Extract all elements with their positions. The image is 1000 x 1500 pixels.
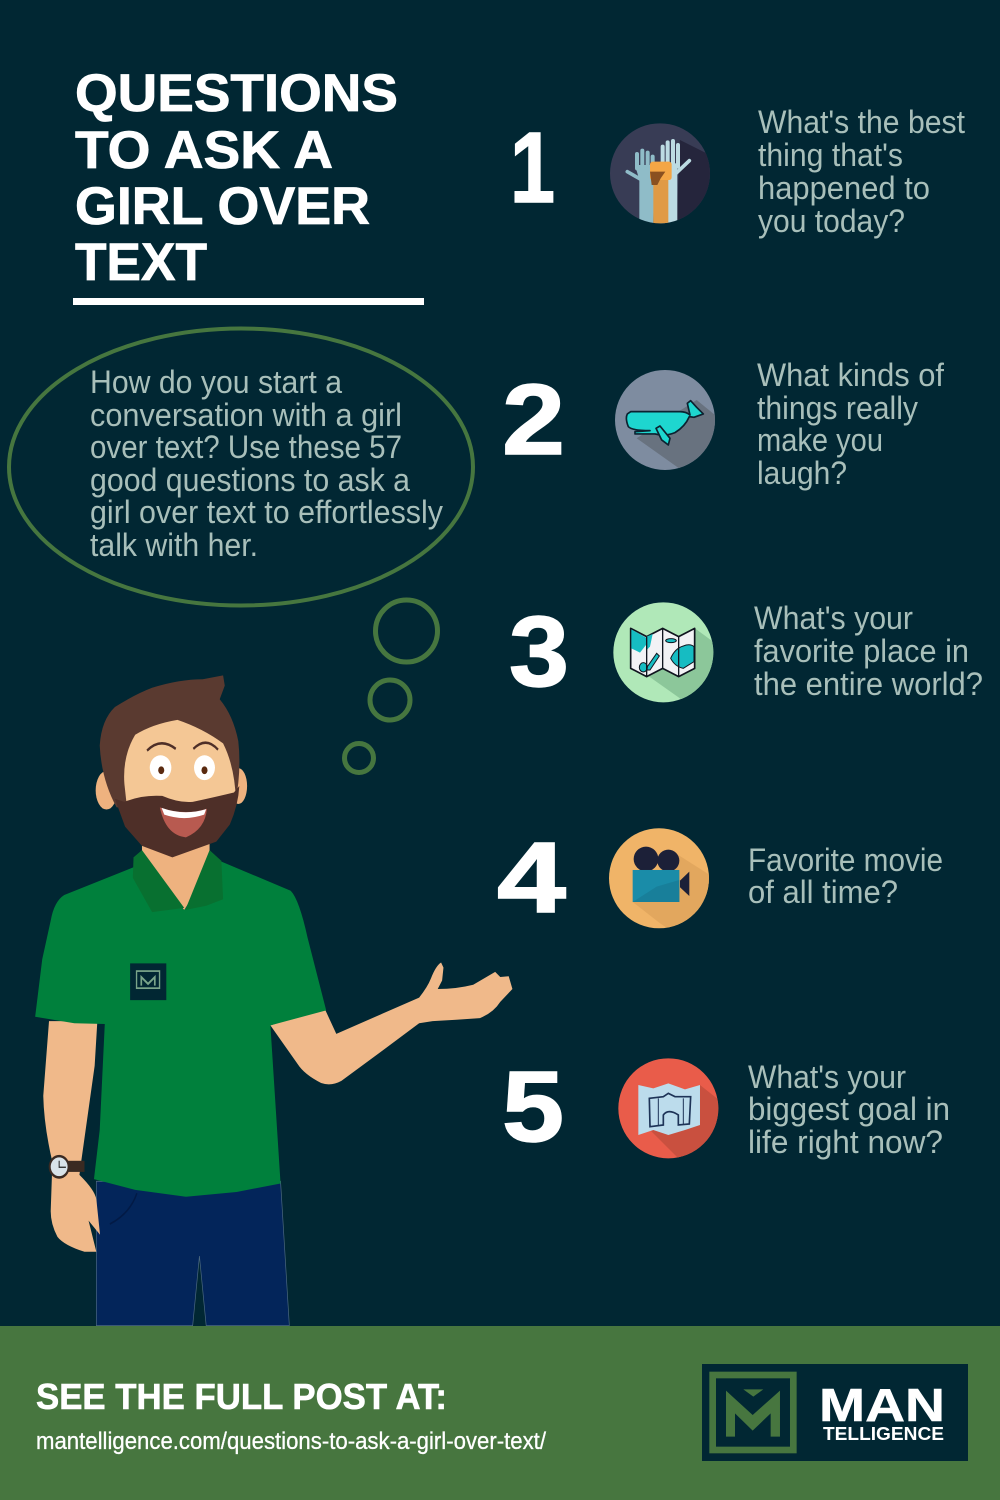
question 4: of all time? (748, 874, 898, 910)
question 5: What's your (748, 1059, 906, 1095)
icon: blue map (618, 1058, 718, 1158)
right arm and hand (270, 963, 512, 1084)
question 3: What's your (754, 600, 913, 636)
mouth (160, 807, 207, 837)
wristwatch (49, 1155, 85, 1179)
number 4: 4 (497, 822, 566, 934)
title underline (73, 298, 424, 305)
number 1: 1 (510, 112, 555, 224)
title (75, 64, 398, 292)
thought bubble (9, 328, 473, 772)
question 2 (757, 357, 944, 491)
footer heading: SEE THE FULL POST AT: (36, 1376, 447, 1417)
title: GIRL OVER (75, 177, 370, 236)
intro text: over text? Use these 57 (90, 429, 402, 465)
question 4 (748, 842, 943, 910)
question 1: thing that's (758, 137, 903, 173)
logo (702, 1364, 968, 1461)
eyebrows (147, 743, 218, 751)
question 2: laugh? (757, 455, 847, 491)
intro text: talk with her. (90, 527, 258, 563)
footer band (0, 1326, 1000, 1500)
question 1: happened to (758, 170, 930, 206)
question 1: you today? (758, 203, 905, 239)
beard (115, 786, 239, 857)
question 3: favorite place in (754, 633, 969, 669)
title: QUESTIONS (75, 64, 398, 123)
question 4: Favorite movie (748, 842, 943, 878)
question 1 (758, 104, 965, 239)
question 1: What's the best (758, 104, 965, 140)
intro text: conversation with a girl (90, 397, 402, 433)
logo: TELLIGENCE (823, 1424, 944, 1444)
left arm and hand (43, 1021, 100, 1252)
title: TEXT (75, 233, 207, 292)
shirt collar (133, 850, 223, 912)
question 5 (748, 1059, 950, 1160)
intro text: good questions to ask a (90, 462, 410, 498)
question 3 (754, 600, 983, 702)
icon: raised hands (610, 123, 710, 224)
trousers (96, 1181, 289, 1326)
title: TO ASK A (75, 121, 333, 180)
green polo shirt (35, 861, 326, 1197)
hair (100, 675, 239, 807)
question 3: the entire world? (754, 666, 983, 702)
logo: MAN (819, 1379, 945, 1431)
neck (142, 839, 210, 910)
question 5: life right now? (748, 1124, 943, 1160)
footer url: mantelligence.com/questions-to-ask-a-girl-over-text/ (36, 1428, 546, 1455)
number 5: 5 (502, 1051, 564, 1163)
number 3: 3 (509, 596, 569, 708)
question 2: What kinds of (757, 357, 944, 393)
intro text: How do you start a (90, 364, 342, 400)
ears (96, 768, 247, 810)
icon: folded map (613, 602, 714, 702)
face (124, 720, 236, 839)
icon: film camera (609, 828, 709, 928)
man illustration (35, 675, 512, 1326)
intro text: girl over text to effortlessly (90, 494, 443, 530)
question 2: things really (757, 390, 918, 426)
question 2: make you (757, 422, 883, 458)
intro text (90, 364, 443, 563)
icon: whale (615, 370, 715, 470)
number 2: 2 (502, 364, 565, 476)
question 5: biggest goal in (748, 1091, 950, 1127)
shirt logo badge (130, 963, 166, 1000)
eyes (150, 755, 215, 780)
